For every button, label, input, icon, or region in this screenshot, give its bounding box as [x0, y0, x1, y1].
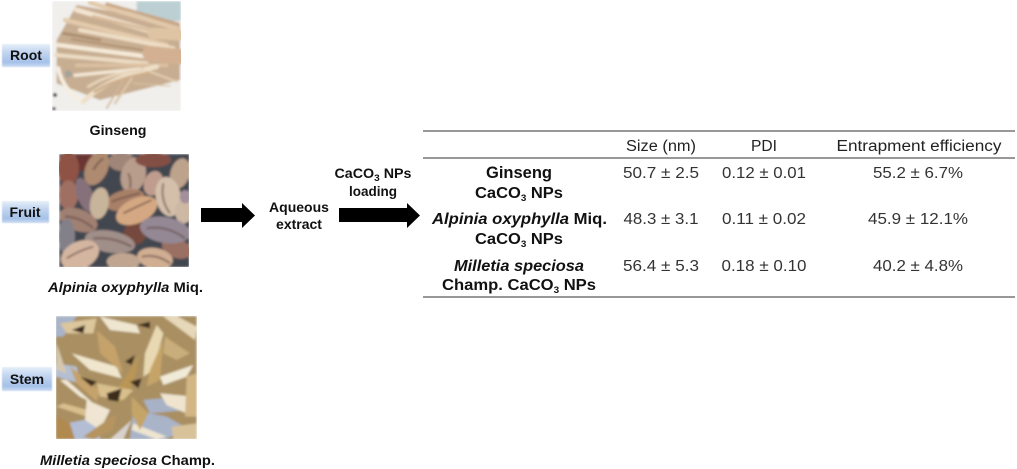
text: CaCO3 NPs loading: 3 [374, 173, 380, 184]
row: Milletia speciosa Champ. CaCO3 NPs: 0.18 ± 0.10 [722, 258, 807, 275]
row: Ginseng CaCO3 NPs: 55.2 ± 6.7% [873, 165, 963, 182]
label: Fruit: Fruit [9, 204, 41, 220]
photo: Milletia speciosa stem slices [56, 316, 197, 439]
table: nanoparticle characterisation [423, 131, 1015, 297]
table header: Entrapment efficiency [836, 138, 1002, 155]
row: Ginseng CaCO3 NPs: NPs [526, 185, 563, 202]
row: Alpinia oxyphylla Miq. CaCO3 NPs: 3 [521, 239, 526, 250]
row: Ginseng CaCO3 NPs: 50.7 ± 2.5 [623, 165, 699, 182]
row: Ginseng CaCO3 NPs: CaCO [475, 185, 519, 202]
label: Root: Root [10, 47, 42, 63]
text: CaCO3 NPs loading [334, 166, 412, 199]
row: Alpinia oxyphylla Miq. CaCO3 NPs: NPs [526, 231, 563, 248]
arrow: extract to nanoparticles [339, 203, 420, 228]
row: Ginseng CaCO3 NPs [475, 164, 963, 204]
label: Stem [2, 367, 52, 391]
text: CaCO3 NPs loading: loading [349, 184, 397, 199]
caption: Milletia speciosa Champ.: Milletia speciosa Champ. [40, 452, 215, 468]
arrow: plants to aqueous extract [201, 203, 255, 228]
caption: Alpinia oxyphylla Miq.: Alpinia oxyphylla Miq. [47, 279, 203, 295]
row: Alpinia oxyphylla Miq. CaCO3 NPs [431, 211, 968, 250]
row: Alpinia oxyphylla Miq. CaCO3 NPs: Alpinia oxyphylla Miq. [431, 211, 607, 228]
row: Alpinia oxyphylla Miq. CaCO3 NPs: 0.11 ± 0.02 [722, 211, 806, 228]
panel: stem source [2, 316, 215, 468]
row: Milletia speciosa Champ. CaCO3 NPs: 3 [554, 285, 559, 296]
row: Milletia speciosa Champ. CaCO3 NPs [442, 258, 963, 296]
photo: Alpinia oxyphylla fruits [59, 154, 189, 267]
row: Ginseng CaCO3 NPs: 3 [521, 193, 526, 204]
caption: Ginseng: Ginseng [90, 122, 146, 138]
table header: PDI [751, 138, 777, 155]
text: Aqueous extract [269, 199, 329, 232]
text: CaCO3 NPs loading: NPs [380, 166, 412, 181]
row: Milletia speciosa Champ. CaCO3 NPs: Milletia speciosa [454, 258, 584, 275]
table header: Size (nm) [626, 138, 696, 155]
row: Milletia speciosa Champ. CaCO3 NPs: 56.4 ± 5.3 [623, 258, 699, 275]
label: Stem: Stem [10, 371, 44, 387]
photo: ginseng roots [52, 1, 181, 111]
row: Milletia speciosa Champ. CaCO3 NPs: 40.2 ± 4.8% [873, 258, 963, 275]
row: Ginseng CaCO3 NPs: Ginseng [486, 164, 552, 182]
row: Alpinia oxyphylla Miq. CaCO3 NPs: CaCO [475, 231, 519, 248]
panel: fruit source [2, 147, 203, 295]
label: Root [2, 44, 50, 67]
row: Ginseng CaCO3 NPs: 0.12 ± 0.01 [722, 165, 806, 182]
row: Milletia speciosa Champ. CaCO3 NPs: Champ. CaCO [442, 277, 550, 294]
text: Aqueous extract: extract [276, 216, 322, 232]
row: Milletia speciosa Champ. CaCO3 NPs: NPs [559, 277, 596, 294]
panel: root source [2, 1, 181, 138]
row: Alpinia oxyphylla Miq. CaCO3 NPs: 48.3 ± 3.1 [624, 211, 699, 228]
text: CaCO3 NPs loading: CaCO [334, 166, 372, 181]
text: Aqueous extract: Aqueous [269, 199, 329, 215]
row: Alpinia oxyphylla Miq. CaCO3 NPs: 45.9 ± 12.1% [868, 211, 968, 228]
label: Fruit [2, 201, 49, 223]
table header [626, 138, 1002, 155]
